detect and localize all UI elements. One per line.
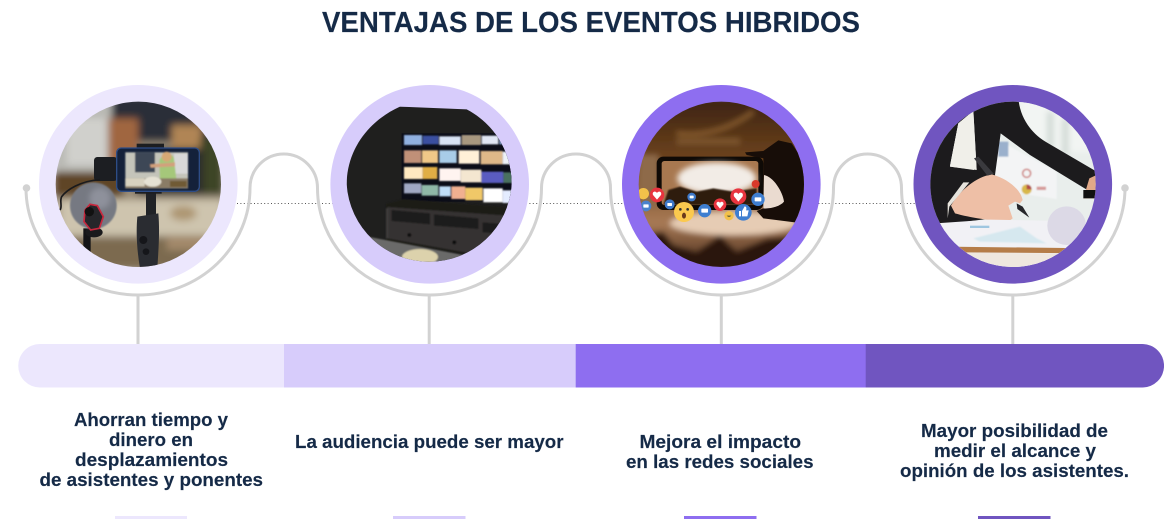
TV screen — [402, 133, 515, 203]
arc end dot right — [1121, 184, 1129, 192]
segmented progress bar — [18, 344, 1164, 388]
text: step 3: Mejora el impacto — [640, 432, 801, 452]
microphone — [60, 180, 118, 252]
stems — [136, 295, 1014, 345]
background chart paper — [995, 138, 1057, 199]
hand and pen — [948, 157, 1097, 222]
phone with concert screen — [657, 157, 763, 210]
documents on clipboard — [940, 206, 1087, 267]
text: step 1: de asistentes y ponentes — [40, 470, 263, 490]
text: step 1 — [40, 410, 263, 490]
dotted connector line — [237, 202, 916, 204]
reaction emojis — [638, 180, 765, 222]
table with popcorn — [370, 236, 463, 262]
step 3 circle: concert and social reactions — [622, 85, 821, 284]
bottom accent bars — [115, 516, 1050, 519]
arc end dot left — [23, 184, 30, 192]
phone — [117, 148, 199, 191]
text: step 1: Ahorran tiempo y — [74, 410, 228, 430]
TV cabinet — [386, 199, 508, 254]
step 1 circle: smartphone on gimbal — [39, 85, 238, 284]
text: step 4 — [900, 421, 1129, 481]
winding connector arc — [26, 154, 1125, 295]
hand holding phone — [745, 140, 808, 223]
gimbal handle — [94, 144, 164, 268]
step 4 circle: businessperson signing a report — [914, 85, 1112, 284]
text: step 1: desplazamientos — [75, 450, 228, 470]
suit — [927, 98, 1097, 225]
text: step 2: La audiencia puede ser mayor — [295, 432, 564, 452]
step 2 circle: television — [330, 85, 529, 284]
title: VENTAJAS DE LOS EVENTOS HIBRIDOS — [322, 7, 860, 39]
text: step 1: dinero en — [109, 430, 193, 450]
text: step 4: Mayor posibilidad de — [921, 421, 1108, 441]
text: step 4: medir el alcance y — [934, 441, 1096, 461]
text: step 3: en las redes sociales — [626, 452, 814, 472]
text: step 4: opinión de los asistentes. — [900, 461, 1129, 481]
text: step 3 — [626, 432, 814, 472]
